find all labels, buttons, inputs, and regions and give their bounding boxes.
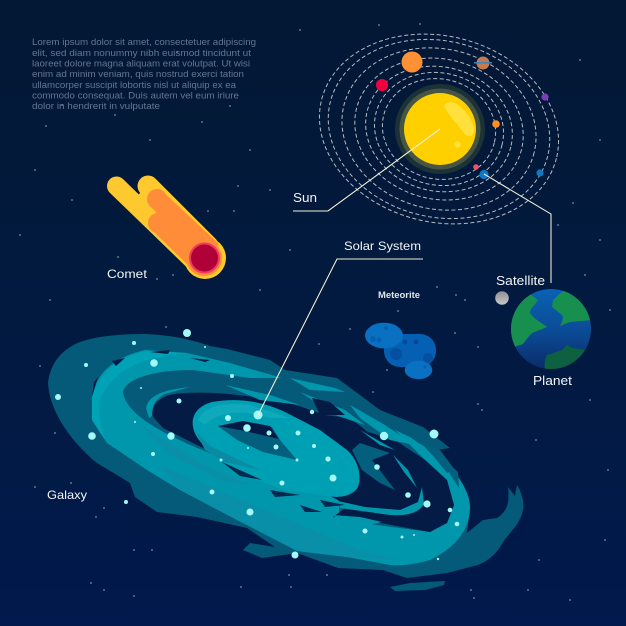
intro text block: enim ad minim veniam, quis nostrud exerci tation bbox=[32, 69, 244, 79]
galaxy lower wisp bbox=[390, 581, 445, 591]
galaxy disc eye bbox=[218, 421, 297, 460]
intro text block: commodo consequat. Duis autem vel eum iriure bbox=[32, 90, 239, 100]
intro text block: dolor in hendrerit in vulputate bbox=[32, 101, 160, 111]
planet bbox=[511, 289, 591, 369]
intro text block: laoreet dolore magna aliquam erat volutpat. Ut wisi bbox=[32, 58, 250, 68]
galaxy inner arcs bbox=[146, 387, 190, 418]
solar system leader line bbox=[258, 259, 423, 415]
satellite label: Satellite bbox=[496, 274, 545, 288]
galaxy ring shading bbox=[92, 351, 187, 440]
sun leader line bbox=[293, 129, 440, 211]
meteorites bbox=[365, 323, 436, 379]
galaxy main ring bbox=[92, 350, 470, 565]
galaxy label: Galaxy bbox=[47, 488, 87, 502]
satellite bbox=[495, 291, 509, 305]
solar system orbits bbox=[299, 9, 579, 249]
intro text block: elit, sed diam nonummy nibh euismod tincidunt ut bbox=[32, 48, 251, 58]
intro text block bbox=[32, 37, 256, 111]
solar system label: Solar System bbox=[344, 239, 421, 253]
sun label: Sun bbox=[293, 191, 317, 205]
galaxy disc lower streaks bbox=[222, 462, 345, 512]
intro text block: ullamcorper suscipit lobortis nisl ut aliquip ex ea bbox=[32, 80, 237, 90]
galaxy stars bbox=[55, 329, 459, 560]
galaxy dark centre bbox=[152, 393, 454, 532]
meteorite label: Meteorite bbox=[378, 290, 420, 300]
comet bbox=[116, 186, 226, 279]
comet label: Comet bbox=[107, 267, 148, 281]
galaxy bbox=[48, 329, 523, 591]
planet label: Planet bbox=[533, 374, 573, 388]
galaxy upper streaks bbox=[225, 378, 468, 495]
galaxy inner disc bbox=[193, 400, 360, 497]
sun bbox=[395, 84, 485, 174]
galaxy outer arm bbox=[48, 334, 523, 578]
intro text block: Lorem ipsum dolor sit amet, consectetuer adipiscing bbox=[32, 37, 256, 47]
planets on orbits bbox=[376, 52, 549, 179]
planet leader line bbox=[484, 174, 551, 283]
